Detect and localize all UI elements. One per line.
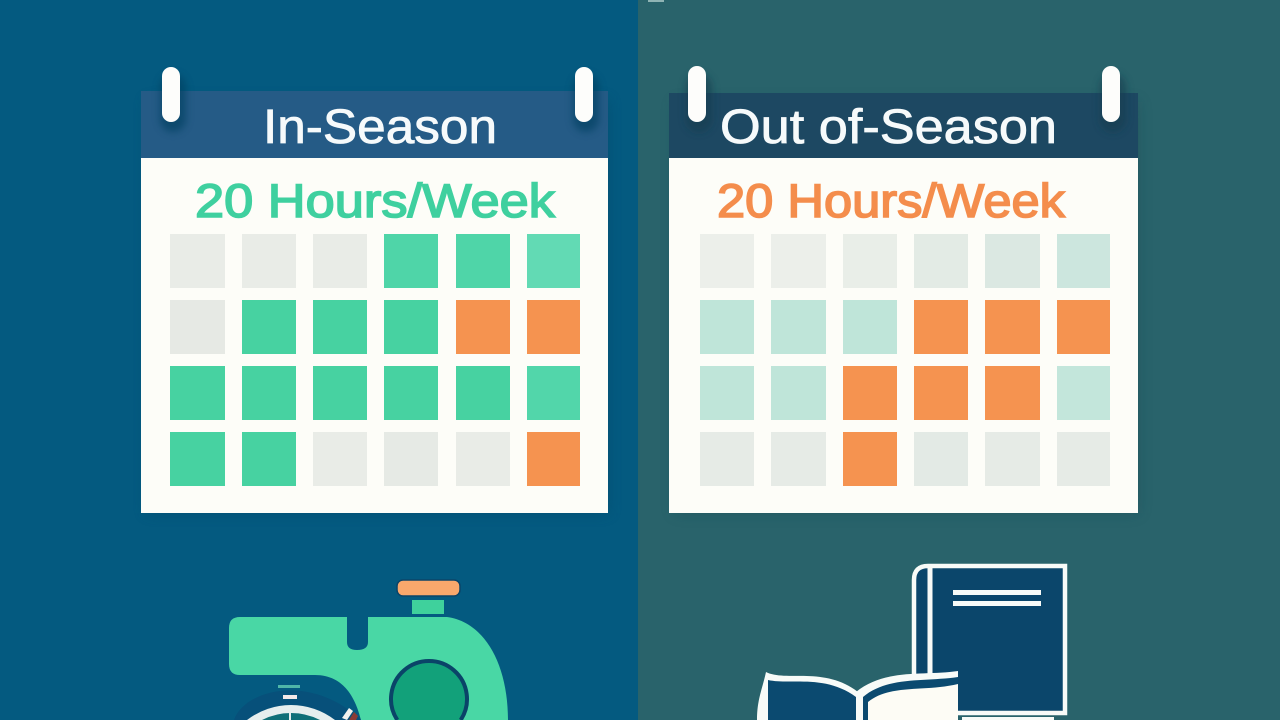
hours label: 20 Hours/Week: 20 Hours/Week <box>717 174 1066 227</box>
panel: out-of-season background <box>638 0 1280 720</box>
heading: In-Season: In-Season <box>263 101 497 154</box>
binder pin left <box>686 66 712 132</box>
icon: whistle and stopwatch <box>229 580 508 720</box>
calendar header: out-of-season <box>669 93 1138 158</box>
schedule grid: in-season <box>170 234 580 486</box>
icon: open book left page <box>757 672 858 720</box>
calendar header: in-season <box>141 91 608 158</box>
hours label: 20 Hours/Week: 20 Hours/Week <box>195 174 556 227</box>
calendar page: in-season <box>141 158 608 513</box>
schedule grid: out-of-season <box>700 234 1110 486</box>
icon: whistle sound hole <box>391 661 467 720</box>
icon: whistle cap <box>397 580 460 596</box>
calendar: in-season <box>141 67 608 513</box>
binder pin left <box>160 67 186 132</box>
binder pin right <box>1100 66 1126 132</box>
icon: whistle body <box>229 617 508 720</box>
icon: open book right page <box>856 671 958 720</box>
heading: Out of-Season: Out of-Season <box>720 101 1057 154</box>
calendar: out-of-season <box>669 66 1138 513</box>
top edge mark <box>648 0 664 2</box>
icon: books <box>757 566 1065 720</box>
icon: stopwatch <box>234 685 361 720</box>
icon: whistle stem <box>412 600 444 614</box>
binder pin right <box>573 67 599 132</box>
icon: closed book <box>914 566 1065 720</box>
calendar page: out-of-season <box>669 158 1138 513</box>
panel: in-season background <box>0 0 638 720</box>
